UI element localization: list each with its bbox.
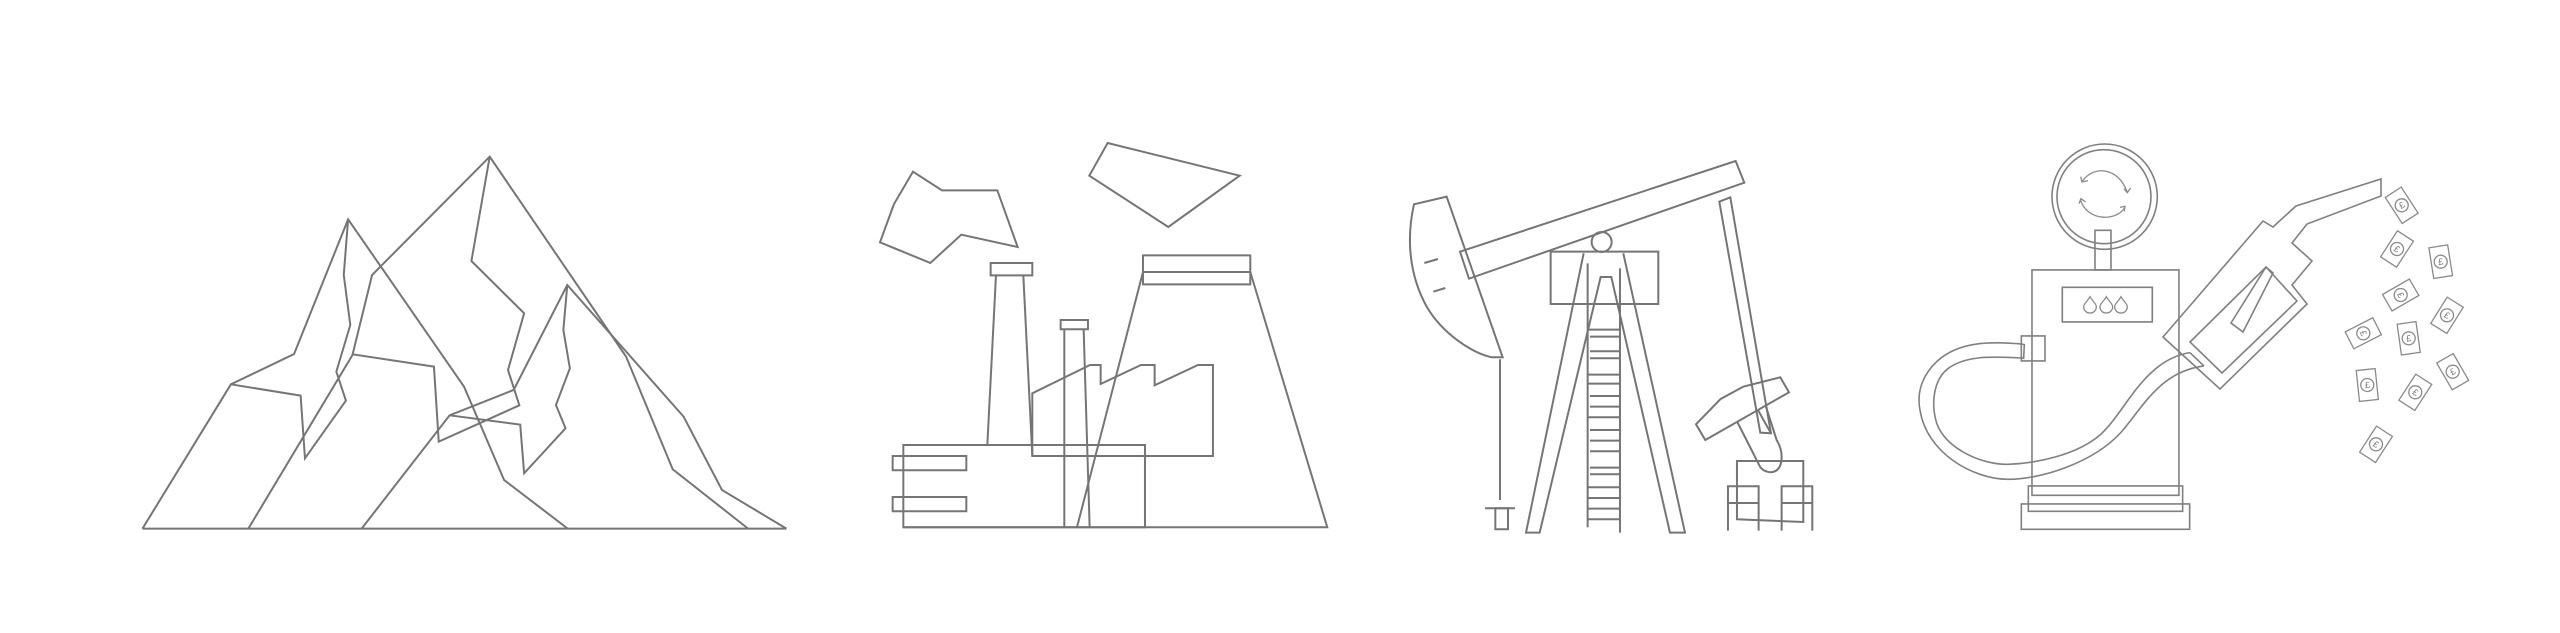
icon: fuel nozzle [2163, 179, 2381, 389]
banknotes [2345, 187, 2469, 462]
right mountain [362, 285, 786, 529]
smoke cloud left [880, 172, 1018, 263]
right mountain ridge [450, 285, 570, 473]
smoke cloud right [1089, 143, 1240, 227]
icon: oil pump jack [1410, 161, 1812, 533]
left mountain [142, 219, 568, 529]
note 2: £ [2392, 243, 2402, 255]
note 4 [2383, 279, 2419, 311]
upper window [893, 456, 966, 470]
cooling tower [903, 255, 1327, 527]
trigger [2231, 267, 2273, 332]
note 1: £ [2397, 200, 2407, 211]
note 11 [2360, 426, 2392, 462]
main building [903, 445, 1145, 527]
hose connector [2021, 336, 2045, 361]
pitman arm [1719, 197, 1771, 433]
pump body [2032, 270, 2179, 495]
note 5 [2431, 297, 2463, 333]
samson post head [1551, 252, 1658, 304]
note 9: £ [2364, 380, 2370, 390]
counterweight [1696, 377, 1789, 440]
refresh arrows [2079, 171, 2131, 217]
ladder [1588, 263, 1620, 533]
gauge dial [2052, 144, 2157, 249]
note 2 [2381, 231, 2413, 267]
note 1 [2385, 187, 2418, 223]
note 10 [2399, 374, 2432, 410]
saddle bearing [1592, 232, 1612, 252]
tall chimney [987, 263, 1032, 456]
right base [1782, 486, 1812, 531]
middle mountain ridge [352, 157, 524, 442]
note 6: £ [2358, 329, 2369, 338]
note 7 [2397, 322, 2420, 355]
icon: factory [880, 143, 1327, 527]
note 5: £ [2442, 310, 2452, 321]
note 7: £ [2406, 333, 2412, 344]
horse head marks [1424, 259, 1445, 292]
note 3: £ [2437, 256, 2444, 267]
left mountain ridge [231, 219, 350, 458]
note 8: £ [2448, 366, 2457, 377]
middle mountain [248, 157, 748, 529]
display [2062, 287, 2152, 322]
walking beam [1460, 161, 1744, 279]
wellhead [1485, 508, 1515, 529]
crank arm [1738, 407, 1782, 472]
left base [1728, 486, 1759, 531]
note 10: £ [2410, 387, 2420, 398]
horse head [1410, 197, 1503, 357]
gear box [1737, 461, 1803, 522]
note 11: £ [2371, 439, 2381, 450]
lower window [893, 497, 966, 511]
note 3 [2429, 245, 2453, 278]
note 9 [2356, 369, 2378, 401]
thin chimney [1061, 320, 1090, 527]
polished rod [1499, 359, 1501, 500]
hose [1919, 343, 2204, 479]
base plate upper [2028, 486, 2183, 511]
base plate lower [2021, 504, 2190, 529]
icon: fuel pump [1919, 144, 2204, 529]
note 4: £ [2395, 290, 2406, 300]
trigger guard [2190, 267, 2297, 373]
fuel drops [2084, 297, 2127, 313]
note 6 [2345, 318, 2381, 349]
note 8 [2437, 354, 2469, 390]
ground line [142, 528, 786, 530]
neck [2095, 230, 2111, 270]
icon: mountains [142, 157, 786, 529]
saw-tooth shed [1032, 365, 1213, 456]
nozzle outline [2163, 179, 2381, 389]
samson post legs [1526, 253, 1685, 533]
